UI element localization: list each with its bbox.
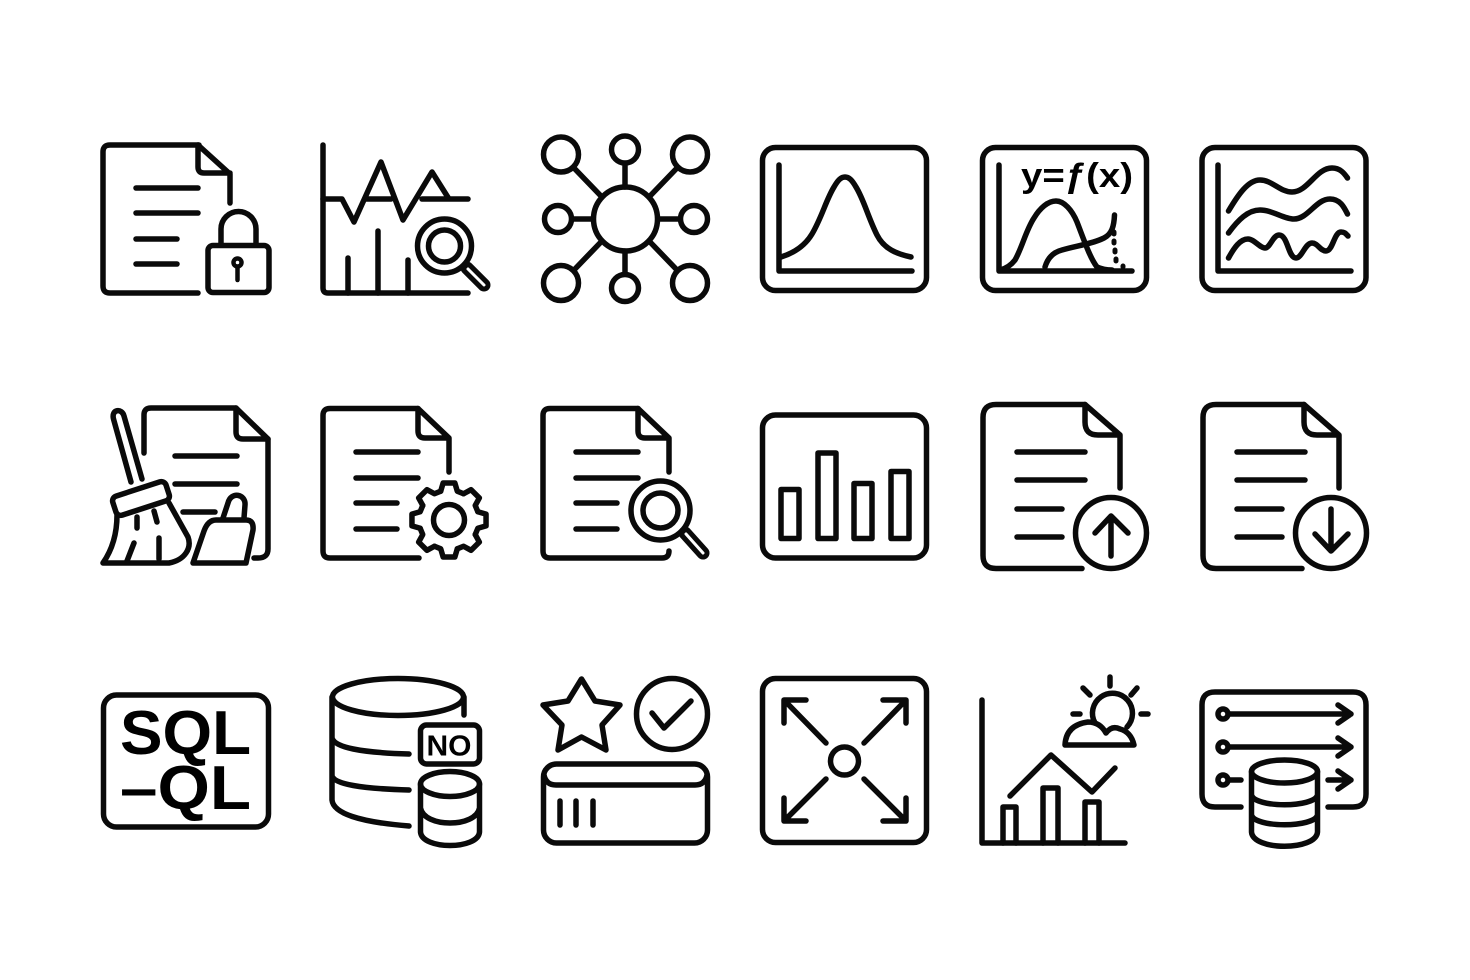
icon: function plot: y=ƒ(x) [1021, 157, 1133, 195]
icon: broom cleaning document [103, 408, 268, 563]
icon: weather trend chart [982, 677, 1148, 843]
icon: document download [1203, 404, 1366, 568]
icon: document upload [983, 404, 1146, 568]
icon: hub network [544, 136, 708, 302]
icon: SQL and no-SQL panel: SQL [120, 699, 251, 768]
icon: NoSQL databases [332, 678, 480, 846]
icon: bell curve chart [762, 148, 926, 290]
icon: wavy line chart [1202, 148, 1366, 290]
icon: document with gear [323, 408, 486, 558]
icon: document with magnifier [543, 408, 703, 558]
icon: NoSQL databases: NO [426, 730, 472, 762]
icon: SQL and no-SQL panel: –QL [120, 754, 251, 823]
icon: expand from center [762, 678, 926, 842]
icon: locked document [103, 145, 269, 293]
icon: star, check and data window [543, 678, 708, 843]
icon: bar chart panel [762, 415, 926, 558]
icon: function plot [982, 148, 1146, 290]
icon: data pipeline database [1202, 692, 1366, 846]
icon: SQL and no-SQL panel [104, 695, 268, 827]
icon: line chart with magnifier [323, 145, 484, 293]
